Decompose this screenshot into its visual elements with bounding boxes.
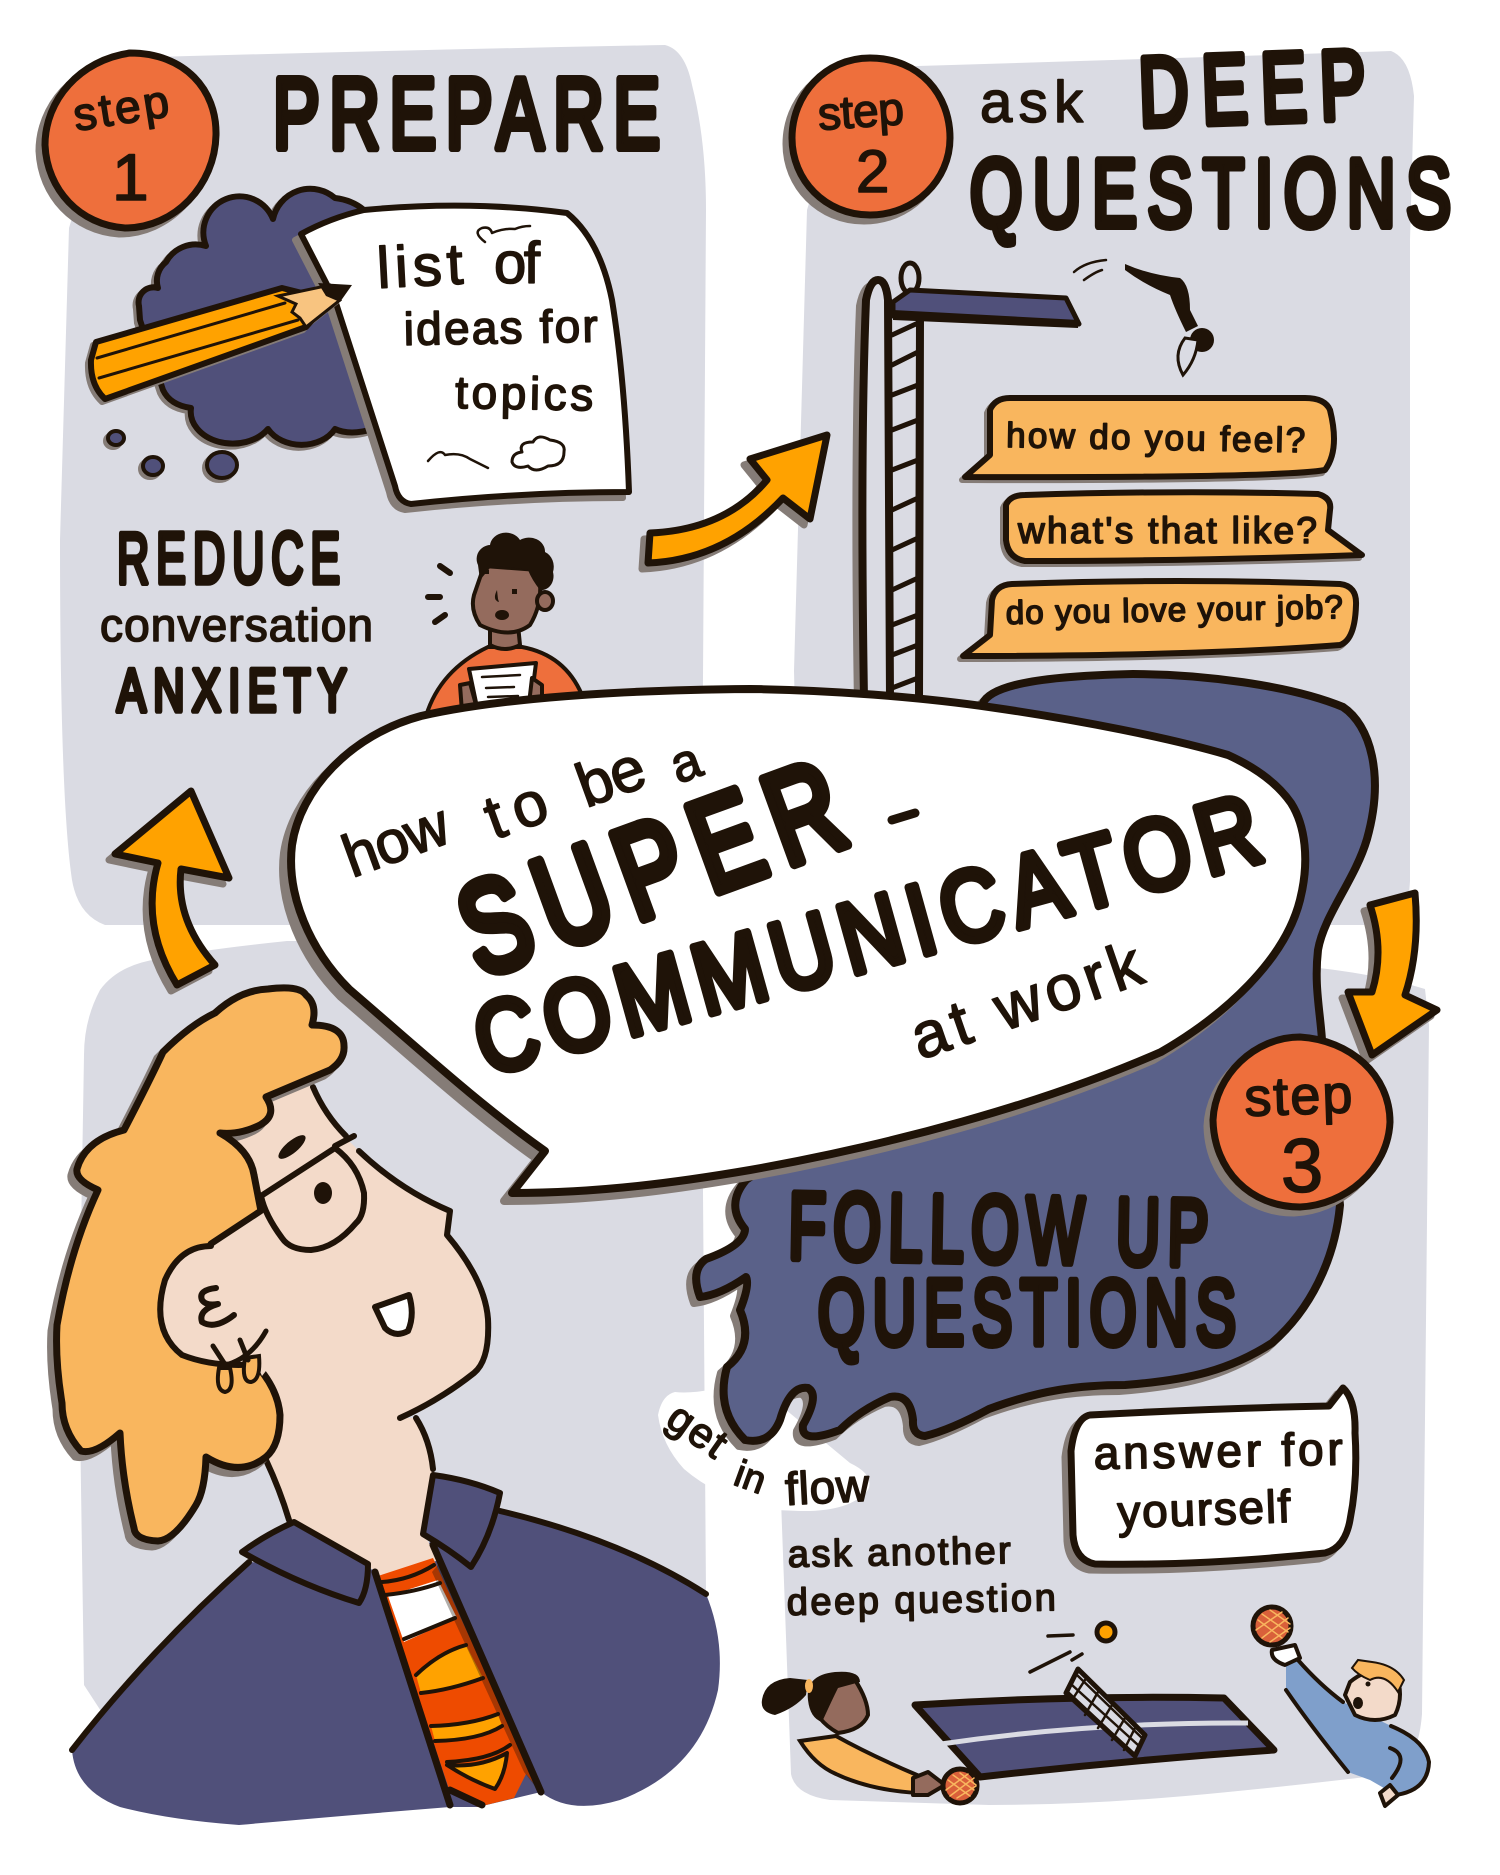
- mouth: [375, 1295, 412, 1334]
- speech bubble: how do you feel: [965, 398, 1334, 477]
- paddle: [1253, 1607, 1291, 1645]
- icon: pencil: [91, 283, 352, 399]
- torso: [426, 647, 582, 716]
- title: communicator: COMMUNICATOR: [462, 772, 1272, 1097]
- speech bubble: answer for yourself: [1071, 1388, 1356, 1564]
- panel: step 1 background: [60, 45, 706, 925]
- heading: follow up: FOLLOW UP: [788, 1173, 1209, 1285]
- paddle hatch: [946, 1773, 976, 1798]
- badge: step 2: [792, 58, 950, 215]
- title: be: be: [567, 733, 655, 821]
- hand lower: [1380, 1785, 1398, 1806]
- arrow: up from woman to step 1: [115, 791, 229, 985]
- paddle: [943, 1769, 977, 1803]
- hair tie: [805, 1679, 813, 1693]
- tie shading: [432, 1560, 538, 1790]
- speech bubble: what's that like: [1006, 492, 1362, 561]
- icon: thought dot small: [108, 431, 124, 445]
- flow: flow: [784, 1459, 871, 1515]
- title: [334, 731, 1272, 1097]
- hand: [913, 1772, 945, 1795]
- panel: step 2 background: [794, 51, 1414, 925]
- text: anxiety: ANXIETY: [117, 658, 347, 725]
- badge: step 1: [45, 53, 216, 228]
- title: a: a: [662, 731, 709, 795]
- body outline right: [500, 1511, 706, 1594]
- paper scribble top: [478, 226, 530, 242]
- body outline left: [72, 1562, 249, 1750]
- paper scribble bottom: [428, 452, 488, 468]
- heading: ask: ask: [980, 70, 1084, 135]
- icon: thought dot large: [207, 452, 237, 478]
- face outline: [266, 1087, 488, 1520]
- text: ideas for: ideas for: [403, 300, 598, 355]
- icon: paper list: [301, 206, 629, 504]
- text: 2: 2: [856, 138, 889, 205]
- head: [812, 1680, 868, 1733]
- heading: questions: QUESTIONS: [818, 1262, 1236, 1364]
- paddle hatch: [1256, 1610, 1290, 1642]
- text: list: list: [375, 232, 465, 301]
- eye: [314, 1182, 332, 1204]
- text: get in flow: [659, 1393, 871, 1515]
- title: how: how: [334, 790, 459, 890]
- text: step: step: [69, 74, 172, 141]
- text: of: of: [494, 231, 541, 296]
- ear and cheek fill: [159, 1210, 300, 1376]
- ear cross line: [213, 1331, 266, 1366]
- tie edges: [375, 1545, 541, 1805]
- text: do you love your job: do you love your job?: [1005, 588, 1343, 631]
- text: conversation: conversation: [100, 599, 373, 651]
- board loop: [901, 263, 919, 293]
- tie stripe lines: [382, 1565, 510, 1762]
- ask another: ask another: [787, 1530, 1011, 1576]
- tie yellow stripe two: [431, 1714, 502, 1741]
- illustration: boy player: [1253, 1607, 1429, 1806]
- speech bubble: do you love your job: [963, 581, 1356, 656]
- icon: ball: [1097, 1623, 1115, 1641]
- main speech bubble: [291, 689, 1305, 1193]
- head: [473, 566, 540, 632]
- panel: woman background: [79, 941, 706, 1725]
- hand upper: [1272, 1645, 1300, 1665]
- title: hyphen: [892, 813, 915, 820]
- tie yellow stripe three: [447, 1753, 507, 1789]
- arrow: step 2 to step 3: [1348, 893, 1437, 1055]
- torso outline: [1286, 1660, 1429, 1795]
- torso: [1286, 1660, 1429, 1795]
- eyebrow: [275, 1131, 309, 1163]
- illustration: woman looking up: [57, 988, 720, 1825]
- diving board: [893, 290, 1079, 324]
- glasses: [261, 1148, 364, 1250]
- net mesh: [1068, 1676, 1142, 1752]
- blob: step 3 navy background: [696, 674, 1375, 1441]
- body: [72, 1511, 720, 1825]
- text: step: step: [1243, 1064, 1353, 1128]
- glasses temple: [211, 1136, 354, 1244]
- get: get: [659, 1393, 737, 1467]
- text: yourself: yourself: [1117, 1480, 1291, 1538]
- title: at work: at work: [901, 927, 1152, 1073]
- illustration: woman player: [762, 1672, 977, 1803]
- icon: ball motion lines: [1030, 1635, 1082, 1672]
- hair: [57, 988, 344, 1541]
- head: [1345, 1670, 1400, 1720]
- tie white stripe: [388, 1580, 457, 1642]
- text: step: step: [816, 82, 905, 140]
- ladder pole: [862, 280, 890, 700]
- hands: [460, 678, 542, 712]
- icon: diver: [1074, 260, 1214, 375]
- ear: [537, 592, 553, 610]
- tie: [375, 1545, 541, 1807]
- text: answer for: answer for: [1093, 1423, 1343, 1479]
- text: reduce: REDUCE: [117, 518, 340, 599]
- text: 1: 1: [112, 140, 149, 214]
- hair bun: [762, 1678, 808, 1715]
- heading: questions: QUESTIONS: [970, 139, 1451, 247]
- text: 3: 3: [1281, 1124, 1323, 1209]
- mouth: [1353, 1697, 1363, 1709]
- hair: [477, 533, 554, 590]
- eye: [1366, 1682, 1370, 1686]
- neck: [490, 625, 520, 649]
- text: what's that like: what's that like?: [1017, 510, 1317, 551]
- deep question: deep question: [786, 1577, 1056, 1624]
- earrings: [218, 1356, 259, 1392]
- text: topics: topics: [455, 366, 594, 420]
- title: to: to: [475, 767, 557, 853]
- worry marks: [428, 566, 450, 622]
- hair top: [808, 1672, 860, 1722]
- arm and body: [800, 1736, 917, 1793]
- face features: [483, 570, 517, 620]
- neck and face: [160, 1085, 488, 1576]
- panel: step 3 background: [779, 968, 1429, 1805]
- icon: thought dot medium: [143, 457, 163, 475]
- collar right: [423, 1475, 500, 1567]
- heading: deep: DEEP: [1137, 29, 1367, 147]
- ladder right rail: [919, 315, 920, 700]
- white flow gap behind get in flow: [658, 1380, 870, 1511]
- ear outline: [160, 1246, 258, 1365]
- net: [1066, 1669, 1145, 1756]
- illustration: ping pong table: [915, 1669, 1274, 1777]
- paper cloud doodle: [512, 437, 564, 470]
- paper lines: [482, 675, 520, 697]
- ear squiggle: [201, 1288, 234, 1325]
- table centre line: [941, 1723, 1248, 1744]
- text: how do you feel: how do you feel?: [1006, 416, 1305, 460]
- icon: diving board and ladder: [862, 263, 1079, 700]
- icon: person reading: [426, 533, 582, 716]
- ladder rungs: [892, 323, 918, 688]
- in: in: [729, 1453, 771, 1503]
- tie yellow stripe: [416, 1645, 483, 1693]
- icon: thought cloud: [108, 189, 400, 478]
- badge: step 3: [1213, 1037, 1390, 1209]
- text: ask another deep question: [786, 1530, 1056, 1624]
- heading: prepare: PREPARE: [273, 59, 660, 170]
- arrow: step 1 to step 2: [648, 435, 827, 563]
- hair: [1352, 1660, 1404, 1692]
- paper held: [469, 663, 536, 712]
- collar left: [242, 1522, 368, 1603]
- title: super: SUPER: [440, 733, 862, 1005]
